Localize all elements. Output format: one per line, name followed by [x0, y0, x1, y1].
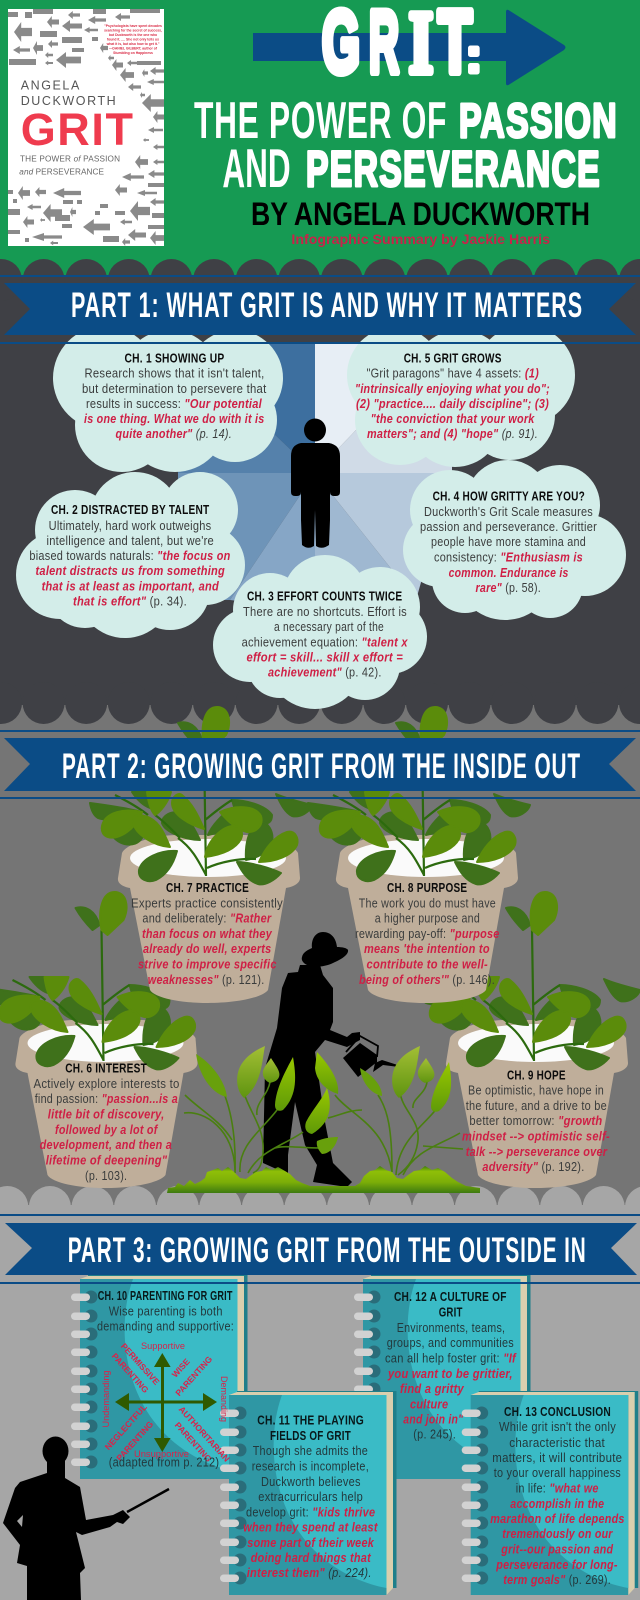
chapter 2 text — [29, 518, 231, 608]
chapter 9 text: talk --> perseverance over — [466, 1144, 608, 1159]
chapter 7 text — [131, 895, 283, 987]
chapter 6 text: followed by a lot of — [55, 1122, 159, 1137]
book cover: but Duckworth is the one who — [109, 33, 157, 37]
part 2 section background — [0, 682, 640, 1205]
notebook: chapter 12 — [354, 1275, 530, 1479]
pot shape — [118, 835, 300, 1003]
cloud shape — [53, 326, 283, 472]
book cover: what it is, but also how to get it." — [106, 42, 160, 46]
panel: chapter 1 cloud — [53, 326, 283, 472]
chapter 9 text — [462, 1083, 610, 1174]
icon: gardener silhouette with watering can — [263, 932, 407, 1187]
chapter 10 intro — [97, 1303, 234, 1334]
chapter 6 text — [34, 1076, 180, 1183]
quadrant labels: PARENTING — [114, 1419, 155, 1463]
book cover: DUCKWORTH — [21, 94, 116, 108]
quadrant labels: WISE — [170, 1356, 192, 1380]
book cover: and PERSEVERANCE — [19, 167, 105, 176]
book cover — [8, 9, 164, 246]
book cover: THE POWER of PASSION — [20, 155, 120, 164]
panel: chapter 7 pot — [90, 707, 312, 1003]
chapter 2 text: that is effort" (p. 34). — [73, 594, 187, 608]
pot soil opening — [348, 839, 504, 877]
chapter 12 text: can all help foster grit: "If — [385, 1350, 517, 1366]
chapter 5 text: "intrinsically enjoying what you do"; — [355, 381, 550, 396]
chapter 13 heading: CH. 13 CONCLUSION — [504, 1404, 611, 1419]
book cover: found it. .... She not only tells us — [107, 38, 159, 42]
chapter 2 text: biased towards naturals: "the focus on — [29, 548, 231, 563]
chapter 7 text: already do well, experts — [143, 941, 271, 956]
chapter 5 text: "the conviction that your work — [371, 411, 535, 426]
chapter 9 text: the future, and a drive to be — [466, 1098, 607, 1113]
chapter 5 text: matters"; and (4) "hope" (p. 91). — [367, 426, 538, 441]
chapter 11 text: doing hard things that — [251, 1550, 371, 1565]
notebook: chapter 11 — [220, 1391, 396, 1595]
chapter 11 heading: CH. 11 THE PLAYING — [257, 1413, 364, 1428]
chapter 11 text — [243, 1443, 378, 1580]
chapter 13 text: matters, it will contribute — [492, 1450, 622, 1465]
arrow behind title — [253, 10, 566, 85]
icon: presenter silhouette with pointer — [3, 1436, 169, 1600]
chapter 3 text: a necessary part of the — [274, 619, 384, 634]
chapter 10 intro: demanding and supportive: — [97, 1319, 234, 1334]
chapter 10 intro: Wise parenting is both — [109, 1303, 223, 1318]
quadrant labels: PERMISSIVE — [119, 1341, 162, 1387]
chapter 4 text: passion and perseverance. Grittier — [420, 519, 597, 534]
chapter 5 text: (2) "practice.... daily discipline"; (3) — [356, 396, 549, 411]
pot soil opening — [28, 1024, 184, 1062]
chapter 7 text: strive to improve specific — [138, 957, 277, 972]
quadrant labels: Supportive — [141, 1341, 185, 1351]
pot shape — [446, 1020, 628, 1188]
quadrant labels: Undemanding — [101, 1371, 111, 1427]
chapter 1 text — [82, 366, 267, 441]
chapter 4 text: consistency: "Enthusiasm is — [434, 550, 583, 564]
part 3 section background — [0, 1186, 640, 1600]
chapter 4 text: rare" (p. 58). — [476, 580, 541, 595]
quadrant labels — [101, 1341, 232, 1464]
chapter 5 text — [355, 366, 550, 441]
chapter 8 text: being of others'" (p. 146). — [359, 972, 495, 987]
cloud shape — [403, 460, 626, 620]
part 1 section background — [0, 259, 640, 705]
chapter 4 text: Duckworth's Grit Scale measures — [424, 504, 593, 519]
plants and grass foreground — [167, 1046, 480, 1193]
chapter 1 text: but determination to persevere that — [82, 381, 267, 396]
chapter 6 text: (p. 103). — [85, 1168, 127, 1183]
chapter 12 page — [354, 1275, 530, 1479]
chapter 9 text: better tomorrow: "growth — [469, 1113, 602, 1128]
chapter 8 heading: CH. 8 PURPOSE — [387, 880, 467, 895]
chapter 6 heading: CH. 6 INTEREST — [65, 1061, 147, 1076]
chapter 11 text: when they spend at least — [243, 1520, 378, 1534]
pot soil opening — [130, 839, 286, 877]
chapter 1 heading: CH. 1 SHOWING UP — [124, 351, 225, 366]
chapter 9 foliage — [418, 892, 640, 1069]
chapter 8 text: means 'the intention to — [364, 941, 490, 956]
book cover: ANGELA — [21, 78, 80, 92]
chapter 7 foliage — [90, 707, 312, 884]
chapter 12 text: (p. 245). — [413, 1426, 456, 1442]
chapter 11 text: Though she admits the — [253, 1443, 368, 1458]
chapter 11 text: research is incomplete, — [252, 1458, 369, 1474]
book cover: GRIT — [21, 104, 133, 155]
chapter 3 text: achievement equation: "talent x — [242, 634, 408, 650]
chapter 4 heading: CH. 4 HOW GRITTY ARE YOU? — [433, 489, 585, 504]
chapter 7 heading: CH. 7 PRACTICE — [166, 880, 249, 895]
panel: chapter 3 cloud — [213, 555, 427, 709]
chapter 11 text: some part of their week — [247, 1535, 374, 1550]
chapter 11 heading — [257, 1413, 364, 1443]
book cover: "Psychologists have spent decades — [104, 24, 162, 28]
banner: part 2 — [0, 730, 640, 799]
chapter 2 heading: CH. 2 DISTRACTED BY TALENT — [51, 502, 209, 517]
pot soil opening — [458, 1024, 614, 1062]
quadrant labels: PARENTING — [173, 1354, 214, 1398]
chapter 7 text: weaknesses" (p. 121). — [148, 972, 264, 987]
notebook: chapter 10 page — [71, 1275, 248, 1479]
chapter 12 text — [385, 1320, 517, 1442]
panel: chapter 6 pot — [0, 892, 210, 1188]
chapter 9 text: Be optimistic, have hope in — [468, 1083, 604, 1098]
icon: standing person — [291, 418, 340, 548]
chapter 3 text: effort = skill... skill x effort = — [246, 650, 403, 664]
quadrant arrows — [115, 1353, 217, 1452]
chapter 4 text: people have more stamina and — [431, 534, 586, 549]
chapter 6 text: little bit of discovery, — [48, 1107, 164, 1122]
chapter 6 text: lifetime of deepening" — [46, 1153, 168, 1168]
banner: part 1 — [0, 275, 640, 344]
cloud shape — [347, 325, 575, 467]
chapter 8 text: The work you do must have — [359, 895, 496, 910]
chapter 3 text — [242, 604, 408, 680]
panel: chapter 5 cloud — [347, 325, 575, 467]
quadrant labels: AUTHORITARIAN — [177, 1404, 232, 1464]
chapter 13 text: tremendously on our — [502, 1526, 613, 1541]
chapter 1 text: results in success: "Our potential — [86, 396, 262, 411]
chapter 10 text and parenting quadrant — [97, 1288, 234, 1470]
chapter 12 text: and join in" — [403, 1412, 464, 1426]
quadrant labels: PARENTING — [110, 1351, 151, 1395]
chapter 9 heading: CH. 9 HOPE — [507, 1067, 566, 1082]
header background — [0, 0, 640, 278]
chapter 12 text: find a gritty — [400, 1381, 464, 1396]
chapter 4 text — [420, 504, 597, 595]
chapter 12 text: culture — [410, 1396, 448, 1412]
chapter 3 text: achievement" (p. 42). — [268, 664, 382, 680]
chapter 12 text: groups, and communities — [387, 1335, 514, 1350]
chapter 2 text: Ultimately, hard work outweighs — [49, 518, 212, 533]
chapter 13 text: term goals" (p. 269). — [503, 1572, 611, 1587]
chapter 3 text: There are no shortcuts. Effort is — [243, 604, 407, 619]
panel: chapter 4 cloud — [403, 460, 626, 620]
quadrant labels: PARENTING — [173, 1420, 214, 1464]
chapter 11 text: develop grit: "kids thrive — [246, 1504, 375, 1520]
chapter 5 heading: CH. 5 GRIT GROWS — [404, 351, 502, 366]
cloud shape — [16, 472, 245, 638]
title: GRIT: : — [466, 29, 482, 82]
chart: eight-wedge fan behind person — [178, 342, 452, 610]
chapter 8 text: a higher purpose and — [375, 911, 480, 926]
chapter 7 text: Experts practice consistently — [131, 895, 283, 910]
chapter 5 text: "Grit paragons" have 4 assets: (1) — [366, 366, 539, 381]
chapter 1 text: quite another" (p. 14). — [116, 426, 232, 441]
banner: part 3 — [0, 1214, 640, 1284]
panel: chapter 9 pot — [418, 892, 640, 1188]
pot shape — [336, 835, 518, 1003]
pot shape — [15, 1020, 198, 1188]
chapter 8 foliage — [308, 707, 530, 884]
chapter 13 text: accomplish in the — [510, 1496, 604, 1511]
chapter 8 text: contribute to the well- — [366, 957, 488, 972]
quadrant source note: (adapted from p. 212) — [109, 1455, 219, 1470]
chapter 1 text: Research shows that it isn't talent, — [84, 366, 264, 381]
chapter 6 foliage — [0, 892, 210, 1069]
panel: chapter 2 cloud — [16, 472, 245, 638]
chapter 1 text: is one thing. What we do with it is — [84, 411, 264, 426]
chapter 12 text: Environments, teams, — [397, 1320, 505, 1335]
subtitle — [194, 92, 618, 199]
chapter 9 text: adversity" (p. 192). — [482, 1159, 584, 1174]
chapter 13 text: in life: "what we — [516, 1480, 599, 1496]
chapter 3 heading: CH. 3 EFFORT COUNTS TWICE — [247, 589, 402, 604]
chapter 13 text: perseverance for long- — [495, 1557, 618, 1572]
chapter 13 page — [462, 1391, 638, 1595]
chapter 6 text: Actively explore interests to — [34, 1076, 180, 1091]
notebook: chapter 13 — [462, 1391, 638, 1595]
chapter 12 heading — [394, 1289, 507, 1320]
chapter 13 text — [490, 1419, 625, 1587]
chapter 8 text: rewarding pay-off: "purpose — [355, 926, 500, 941]
subtitle: AND — [222, 137, 291, 199]
quadrant labels: Unsupportive — [134, 1449, 189, 1459]
chapter 4 text: common. Endurance is — [449, 565, 569, 580]
chapter 2 text: intelligence and talent, but we're — [46, 533, 214, 548]
chapter 10 heading: CH. 10 PARENTING FOR GRIT — [98, 1288, 233, 1303]
book cover: searching for the secret of success, — [104, 28, 162, 32]
plant stems behind pots, front garden — [184, 1095, 463, 1175]
credit: Infographic Summary by Jackie Harris — [291, 231, 550, 247]
chapter 8 text — [355, 895, 500, 987]
quadrant labels: NEGLECTFUL — [103, 1402, 149, 1452]
subtitle: THE POWER OF — [194, 92, 447, 150]
chapter 2 text: talent distracts us from something — [36, 563, 225, 578]
book cover: Stumbling on Happiness — [113, 51, 153, 55]
chapter 13 text: grit--our passion and — [500, 1542, 614, 1556]
chapter 12 text: you want to be grittier, — [387, 1366, 513, 1381]
chapter 11 text: interest them" (p. 224). — [247, 1565, 372, 1580]
chapter 6 text: find passion: "passion...is a — [35, 1091, 178, 1106]
chapter 7 text: than focus on what they — [142, 926, 272, 941]
chapter 7 text: and deliberately: "Rather — [142, 911, 272, 926]
chapter 11 heading: FIELDS OF GRIT — [270, 1428, 351, 1443]
chapter 9 text: mindset --> optimistic self- — [462, 1129, 610, 1144]
cloud shape — [213, 555, 427, 709]
chapter 11 page — [220, 1391, 396, 1595]
chapter 11 text: Duckworth believes — [261, 1474, 361, 1489]
panel: chapter 8 pot — [308, 707, 530, 1003]
chapter 13 text: While grit isn't the only — [499, 1419, 616, 1434]
chapter 2 text: that is at least as important, and — [42, 578, 220, 594]
chapter 13 text: characteristic that — [509, 1435, 605, 1450]
title: GRIT — [322, 0, 482, 92]
book cover: —DANIEL GILBERT, author of — [109, 46, 158, 50]
chapter 12 heading: GRIT — [439, 1305, 463, 1320]
chapter 11 text: extracurriculars help — [258, 1489, 363, 1504]
chapter 12 heading: CH. 12 A CULTURE OF — [394, 1289, 507, 1304]
chapter 6 text: development, and then a — [40, 1137, 172, 1152]
quadrant labels: Demanding — [219, 1376, 229, 1422]
